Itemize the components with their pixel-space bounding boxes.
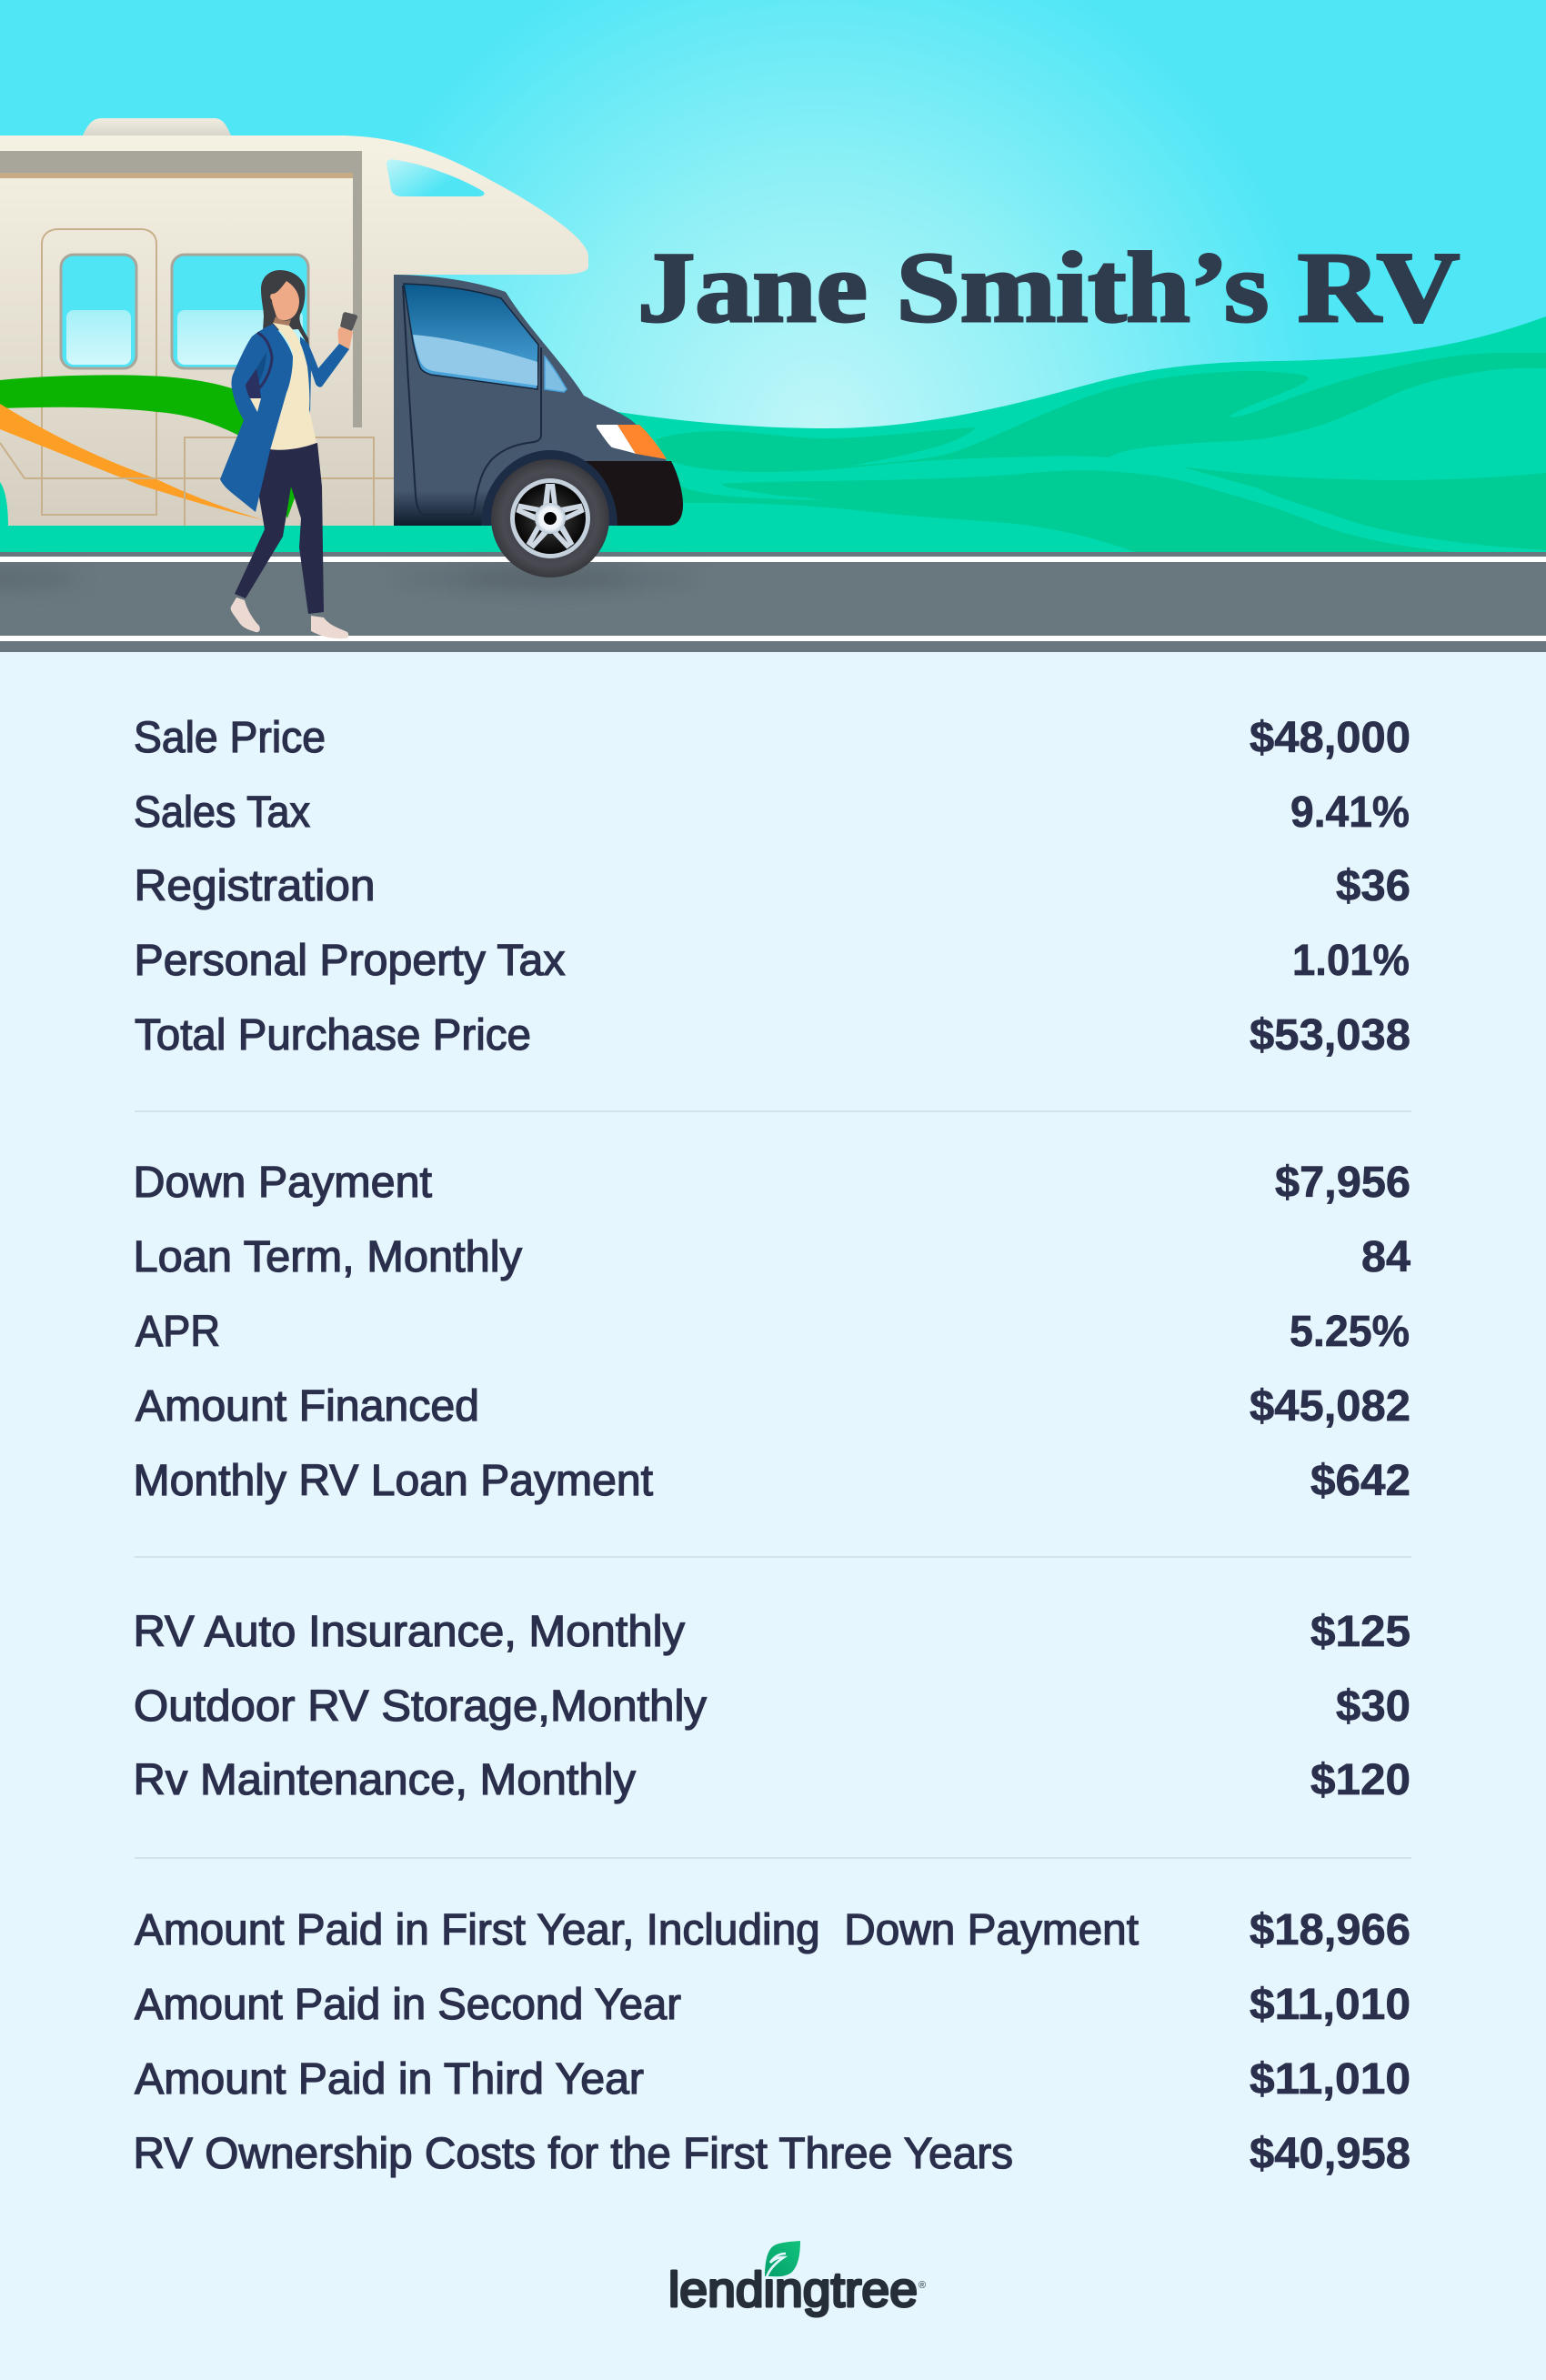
row: Monthly RV Loan Payment <box>133 1457 1410 1505</box>
row: Amount Financed: $45,082 <box>1250 1382 1410 1431</box>
row: three year total: $40,958 <box>1250 2130 1410 2178</box>
headlight <box>597 425 667 459</box>
row: second year <box>135 1981 1410 2029</box>
RV <box>0 118 588 526</box>
row: Monthly RV Loan Payment: $642 <box>1310 1457 1410 1505</box>
cab shell <box>394 275 667 526</box>
row: Sales Tax: 9.41% <box>1290 788 1410 837</box>
row: third year: $11,010 <box>1250 2055 1410 2104</box>
row: Rv Maintenance <box>133 1756 1410 1804</box>
icon: leaf <box>765 2241 800 2277</box>
row: Personal Property Tax: Personal Property Tax <box>135 937 566 985</box>
door outline <box>42 229 156 515</box>
orange stripe <box>0 404 265 520</box>
coat <box>220 324 293 512</box>
wheel arch <box>481 450 617 526</box>
row: three year total: RV Ownership Costs for the First Three Years <box>133 2130 1013 2178</box>
phone <box>340 312 357 331</box>
lendingtree logo <box>668 2241 926 2317</box>
woman with phone <box>220 270 357 638</box>
row: APR: APR <box>136 1308 220 1356</box>
row: Sale Price <box>134 714 1410 762</box>
roof vent <box>83 118 231 136</box>
skylight window <box>386 159 485 196</box>
row: Loan Term <box>133 1233 1410 1281</box>
front wheel <box>491 459 609 577</box>
row: Rv Maintenance: $120 <box>1310 1756 1410 1804</box>
green hills <box>0 316 1546 553</box>
door seam <box>403 286 541 515</box>
front window <box>545 356 567 392</box>
row: APR <box>136 1308 1410 1356</box>
row: Down Payment: Down Payment <box>133 1159 432 1207</box>
window highlight <box>413 335 537 386</box>
hair <box>261 270 309 347</box>
row: Outdoor RV Storage: Outdoor RV Storage,Monthly <box>134 1682 707 1731</box>
row: third year <box>135 2055 1410 2104</box>
row: Down Payment: $7,956 <box>1275 1159 1410 1207</box>
left shoe <box>231 598 260 632</box>
row: Amount Financed: Amount Financed <box>136 1382 479 1431</box>
face <box>270 281 299 320</box>
row: Sale Price: Sale Price <box>134 714 326 762</box>
RV body <box>0 136 588 526</box>
row: Total Purchase Price: $53,038 <box>1250 1011 1410 1059</box>
loan section <box>133 1159 1410 1505</box>
wordmark: lendingtree <box>668 2263 918 2317</box>
row: Personal Property Tax <box>135 937 1410 985</box>
registered mark: ® <box>919 2280 926 2291</box>
row: Registration: Registration <box>135 862 375 910</box>
row: Outdoor RV Storage <box>134 1682 1410 1731</box>
side window 1 <box>61 255 136 368</box>
row: first year: $18,966 <box>1250 1906 1410 1954</box>
row: RV Auto Insurance: $125 <box>1310 1608 1410 1656</box>
purchase price section <box>134 714 1410 1059</box>
hero illustration <box>0 0 1546 652</box>
row: Sales Tax: Sales Tax <box>134 788 310 837</box>
row: first year: Amount Paid in First Year, Including Down Payment <box>135 1906 1139 1954</box>
row: Registration <box>135 862 1410 910</box>
right hand <box>338 325 353 349</box>
row: Rv Maintenance: Rv Maintenance, Monthly <box>133 1756 636 1804</box>
row: Registration: $36 <box>1336 862 1410 910</box>
row: three year total <box>133 2130 1410 2178</box>
monthly costs section <box>133 1608 1410 1804</box>
ownership totals section <box>133 1906 1410 2178</box>
row: second year: $11,010 <box>1250 1981 1410 2029</box>
row: Outdoor RV Storage: $30 <box>1336 1682 1410 1731</box>
row: Total Purchase Price: Total Purchase Price <box>135 1011 531 1059</box>
row: RV Auto Insurance: RV Auto Insurance, Monthly <box>133 1608 685 1656</box>
row: Total Purchase Price <box>135 1011 1410 1059</box>
right shoes <box>311 616 348 638</box>
row: Down Payment <box>133 1159 1410 1207</box>
row: RV Auto Insurance <box>133 1608 1410 1656</box>
row: Loan Term: Loan Term, Monthly <box>133 1233 522 1281</box>
coat sleeve <box>300 336 349 414</box>
coat inner and strap <box>246 333 272 412</box>
windshield side window <box>404 284 538 389</box>
neck shadow <box>273 316 291 326</box>
row: Sales Tax <box>134 788 1410 837</box>
lower panel lines <box>0 437 394 526</box>
bumper <box>582 461 683 526</box>
green stripe <box>0 375 296 518</box>
side window 2 <box>172 255 308 368</box>
row: third year: Amount Paid in Third Year <box>135 2055 644 2104</box>
row: Personal Property Tax: 1.01% <box>1292 937 1410 985</box>
road <box>0 552 1546 652</box>
van cab <box>394 275 683 577</box>
row: Loan Term: 84 <box>1361 1233 1410 1281</box>
awning <box>0 151 362 427</box>
row: APR: 5.25% <box>1290 1308 1410 1356</box>
title: Jane Smith’s RV <box>637 232 1460 343</box>
row: Monthly RV Loan Payment: Monthly RV Loan Payment <box>133 1457 653 1505</box>
row: second year: Amount Paid in Second Year <box>135 1981 681 2029</box>
row: Sale Price: $48,000 <box>1250 714 1410 762</box>
shirt <box>270 323 316 450</box>
trousers <box>235 443 324 614</box>
row: Amount Financed <box>136 1382 1410 1431</box>
sky <box>0 0 1546 555</box>
